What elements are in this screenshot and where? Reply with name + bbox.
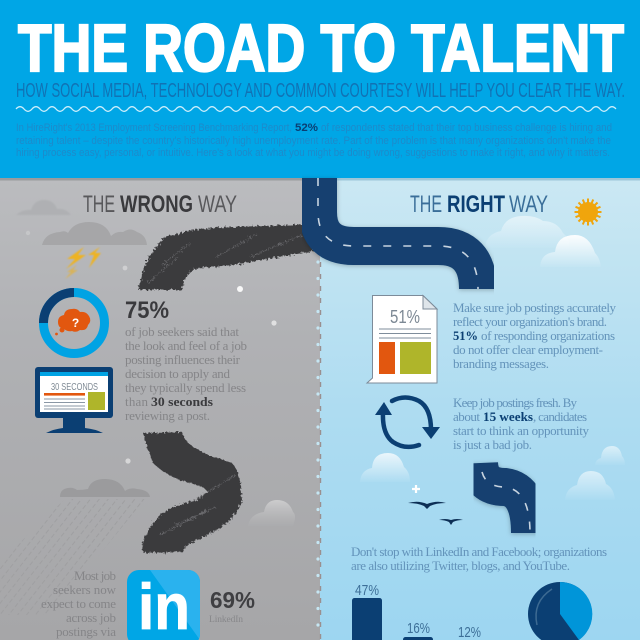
heading: the right way: [410, 191, 548, 218]
text: job posting brand: 51%: [453, 328, 478, 343]
icon: document 51 percent: [367, 296, 437, 383]
pale cloud lower left: [248, 500, 295, 526]
text: job seekers look and feel: the look and feel of a job: [125, 338, 247, 353]
icon: computer monitor 30 seconds: 30 SECONDS: [51, 382, 98, 393]
birds: [408, 502, 463, 525]
text: job posting brand: [453, 300, 616, 371]
heading: the wrong way: THE: [83, 191, 115, 218]
intro paragraph: In HireRight's 2013 Employment Screening Benchmarking Report,: [16, 122, 292, 134]
text: job seekers look and feel: than: [125, 394, 148, 409]
rain cloud: [60, 479, 150, 497]
main road: right way, top: [318, 178, 478, 289]
text: most job seekers: Most job: [74, 568, 116, 583]
heading: the right way: THE: [410, 191, 442, 218]
text: job seekers look and feel: decision to apply and: [125, 366, 230, 381]
scribbled road: wrong way, top: [138, 225, 320, 290]
text: most job seekers: seekers now: [53, 582, 117, 597]
text: job posting brand: do not offer clear employment-: [453, 342, 603, 357]
text: job posting brand: Make sure job postings accurately: [453, 300, 616, 315]
text: job seekers look and feel: 30 seconds: [151, 394, 213, 409]
text: keep postings fresh: about: [453, 409, 480, 424]
donut chart: 75 percent: [44, 292, 104, 354]
stat: 75 percent: 75%: [125, 297, 169, 324]
text: most job seekers: postings via: [56, 624, 116, 639]
heading: the wrong way: [83, 191, 237, 218]
stat: LinkedIn 69 percent: 69%: [210, 587, 255, 613]
heading: the right way: RIGHT: [447, 191, 505, 218]
text: keep postings fresh: , candidates: [533, 409, 587, 424]
icon: orange thought cloud: ?: [72, 316, 79, 330]
stat: LinkedIn 69 percent: LinkedIn: [209, 615, 243, 625]
intro paragraph: 52%: [295, 122, 318, 134]
bar chart: [352, 582, 481, 640]
text: job seekers look and feel: reviewing a post.: [125, 408, 210, 423]
text: dont stop with LinkedIn: [351, 544, 607, 573]
icon: lightning bolts: [65, 247, 101, 279]
scribbled road: wrong way, lower: [142, 432, 242, 553]
wavy divider: [16, 107, 616, 111]
text: most job seekers: [41, 568, 117, 639]
heading: the wrong way: WAY: [198, 191, 237, 218]
centre dotted divider: [318, 262, 320, 640]
panel: the right way background: [320, 178, 640, 640]
stat: LinkedIn 69 percent: [209, 587, 255, 625]
text: keep postings fresh: Keep job postings fresh. By: [453, 395, 578, 410]
icon: document 51 percent: 51%: [390, 307, 420, 327]
lower right road: [479, 463, 530, 533]
clouds right lower: [360, 446, 625, 500]
icon: refresh arrows: [375, 398, 440, 447]
intro paragraph: [16, 122, 612, 159]
text: most job seekers: expect to come: [41, 596, 116, 611]
text: job posting brand: branding messages.: [453, 356, 549, 371]
icon: sun: [574, 198, 602, 226]
text: job posting brand: of responding organizations: [481, 328, 615, 343]
pie chart: [528, 582, 592, 640]
small plus sparkle: [412, 485, 420, 493]
text: job seekers look and feel: of job seekers said that: [125, 324, 239, 339]
bar chart: 47%: [355, 582, 379, 599]
text: job posting brand: reflect your organization's brand.: [453, 314, 607, 329]
wrong way: storm clouds: [16, 200, 147, 245]
heading: the wrong way: WRONG: [120, 191, 193, 218]
heading: the right way: WAY: [509, 191, 548, 218]
text: dont stop with LinkedIn: are also utilizing Twitter, blogs, and YouTube.: [351, 558, 570, 573]
text: job seekers look and feel: they typically spend less: [125, 380, 246, 395]
header band: [0, 0, 640, 179]
text: keep postings fresh: [453, 395, 590, 452]
text: keep postings fresh: 15 weeks: [483, 409, 533, 424]
text: keep postings fresh: is just a bad job.: [453, 437, 532, 452]
rain hatching: [0, 499, 145, 615]
panel: the wrong way background: [0, 178, 320, 640]
bar chart: 16%: [407, 620, 430, 637]
text: dont stop with LinkedIn: Don't stop with LinkedIn and Facebook; organizations: [351, 544, 607, 559]
text: job seekers look and feel: posting influences their: [125, 352, 241, 367]
text: most job seekers: across job: [66, 610, 116, 625]
decorative orbs left: [26, 231, 277, 464]
text: keep postings fresh: start to think an opportunity: [453, 423, 590, 438]
text: job seekers look and feel: [125, 324, 247, 423]
clouds right top: [485, 216, 601, 267]
icon: computer monitor 30 seconds: [35, 367, 113, 433]
